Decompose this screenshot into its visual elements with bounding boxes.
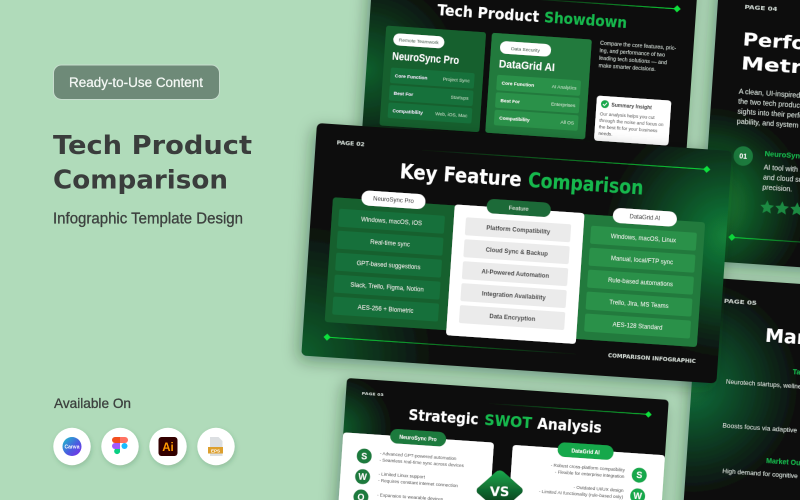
label: DataGrid AI pill xyxy=(612,208,677,227)
column: NeuroSync Pro: AES-256 + Biometric xyxy=(357,305,414,315)
panel: NeuroSync Pro SWOT: NeuroSync Pro xyxy=(399,435,437,443)
text block: description: leading tech solutions — and xyxy=(599,56,667,66)
column: Feature: AI-Powered Automation xyxy=(481,269,550,280)
panel: DataGrid AI SWOT: S xyxy=(636,470,643,480)
card: DataGrid AI: Data Security xyxy=(511,46,541,54)
panel: DataGrid AI SWOT xyxy=(506,439,665,500)
callout: summary insight: Summary Insight xyxy=(611,103,652,111)
title xyxy=(53,131,252,196)
column: Feature: Platform Compatibility xyxy=(486,226,551,236)
heading: key feature comparison xyxy=(399,159,644,200)
text block: intro xyxy=(737,88,800,133)
column: DataGrid AI: AES-128 Standard xyxy=(612,322,663,332)
text block: description: make smarter decisions. xyxy=(598,63,656,73)
panel: NeuroSync Pro SWOT: S xyxy=(361,451,368,461)
column: Feature xyxy=(446,196,585,344)
panel: DataGrid AI SWOT: - Robust cross-platform compatibility xyxy=(551,463,626,473)
panel: NeuroSync Pro SWOT xyxy=(336,425,494,500)
heading: strategic SWOT analysis xyxy=(408,406,602,437)
heading: tech product showdown xyxy=(437,1,628,32)
panel: intro badge: Ready-to-Use Content xyxy=(69,75,203,90)
icon: VS diamond: VS xyxy=(490,485,509,500)
column: DataGrid AI xyxy=(573,206,706,347)
heading: tech product showdown: Tech Product xyxy=(437,1,540,26)
heading: key feature comparison: Comparison xyxy=(527,168,644,200)
icon: Figma xyxy=(101,428,139,465)
panel: page 02 key feature comparison: PAGE 02 xyxy=(336,140,365,148)
column: NeuroSync Pro: Windows, macOS, iOS xyxy=(361,217,422,227)
section: market outlook xyxy=(722,455,800,481)
card: DataGrid AI: AI Analytics xyxy=(552,84,577,92)
icon: EPS file xyxy=(197,428,235,465)
icon: Canva: Canva xyxy=(64,444,80,450)
text block: description xyxy=(598,41,677,74)
metric: 01 NeuroSync xyxy=(730,146,800,218)
callout: summary insight: the best fit for your business xyxy=(599,124,658,133)
panel: page 05 market analysis: PAGE 05 xyxy=(724,299,757,307)
title: Comparison xyxy=(53,166,228,196)
card: NeuroSync Pro: Web, iOS, Mac xyxy=(435,111,468,119)
text block: description: ing, and performance of two xyxy=(599,48,665,59)
section: target audience xyxy=(726,365,800,394)
availability heading: Available On xyxy=(54,395,131,411)
heading: strategic SWOT analysis: Strategic xyxy=(408,406,479,429)
panel: DataGrid AI SWOT: - Limited AI functionality (rule-based only) xyxy=(539,489,624,500)
panel: page 03 SWOT analysis xyxy=(335,378,669,500)
card: DataGrid AI xyxy=(485,33,592,139)
panel: intro badge xyxy=(54,65,220,100)
column: DataGrid AI: Manual, local/FTP sync xyxy=(611,256,673,266)
panel: DataGrid AI SWOT: - Outdated UI/UX design xyxy=(573,485,624,493)
panel: DataGrid AI SWOT: - Flexible for enterprise integration xyxy=(555,469,625,479)
section: benefit: Boosts focus via adaptive xyxy=(722,422,798,435)
text block: description: Compare the core features, pric- xyxy=(600,41,677,52)
icon: Adobe Illustrator: Ai xyxy=(162,442,174,454)
label: Feature pill xyxy=(486,199,551,217)
icon: EPS file: EPS xyxy=(211,448,220,453)
card: NeuroSync Pro: Startups xyxy=(450,95,469,102)
column: Feature: Data Encryption xyxy=(489,314,536,323)
icon: VS diamond xyxy=(477,471,523,500)
column: NeuroSync Pro: GPT-based suggestions xyxy=(356,261,421,271)
icon: Canva xyxy=(53,428,91,465)
card: DataGrid AI: Core Function xyxy=(501,81,534,89)
card: DataGrid AI: All OS xyxy=(560,120,574,127)
column: Feature: Integration Availability xyxy=(482,291,546,302)
subtitle: Infographic Template Design xyxy=(53,210,243,228)
card: NeuroSync Pro: NeuroSync Pro xyxy=(392,51,460,67)
callout: summary insight: through the noise and focus on xyxy=(599,118,664,127)
card: NeuroSync Pro xyxy=(379,26,486,132)
heading: strategic SWOT analysis: SWOT xyxy=(484,411,533,432)
panel: NeuroSync Pro SWOT: - Advanced GPT-powered automation xyxy=(380,451,457,461)
column: DataGrid AI: Windows, macOS, Linux xyxy=(611,234,676,244)
card: DataGrid AI: Compatibility xyxy=(499,116,530,124)
panel: DataGrid AI SWOT: DataGrid AI xyxy=(571,448,600,456)
label: DataGrid AI pill: DataGrid AI xyxy=(629,214,661,222)
card: NeuroSync Pro: Remote Teamwork xyxy=(399,37,439,46)
panel: page 01 product showdown xyxy=(361,0,699,162)
heading: performance metrics xyxy=(741,29,800,84)
title: Tech Product xyxy=(53,131,252,161)
panel: page 02 key feature comparison xyxy=(301,123,732,383)
column: NeuroSync Pro: Real-time sync xyxy=(370,240,410,249)
metric: 01 NeuroSync: precision. xyxy=(762,184,793,193)
column: NeuroSync Pro: Slack, Trello, Figma, Notion xyxy=(350,283,424,294)
panel: NeuroSync Pro SWOT: W xyxy=(358,472,368,482)
callout: summary insight xyxy=(594,96,671,146)
panel: NeuroSync Pro SWOT: - Requires constant internet connection xyxy=(378,478,458,488)
column: DataGrid AI: Rule-based automations xyxy=(608,278,673,288)
card: NeuroSync Pro: Best For xyxy=(393,91,413,98)
panel: NeuroSync Pro SWOT: - Limited Linux support xyxy=(378,471,426,480)
column: Feature: Cloud Sync & Backup xyxy=(485,248,548,258)
column: DataGrid AI: Trello, Jira, MS Teams xyxy=(609,300,669,310)
card: NeuroSync Pro: Compatibility xyxy=(392,108,423,116)
panel: page 03 SWOT analysis: PAGE 03 xyxy=(362,391,384,397)
label: NeuroSync Pro pill: NeuroSync Pro xyxy=(373,196,415,205)
card: DataGrid AI: Enterprises xyxy=(551,101,576,109)
section: market outlook: High demand for cognitive xyxy=(722,468,798,480)
metric: 01 NeuroSync: 01 xyxy=(739,153,747,161)
column: NeuroSync Pro xyxy=(325,188,458,330)
label: Feature pill: Feature xyxy=(508,206,529,213)
footer label: COMPARISON INFOGRAPHIC xyxy=(608,353,697,365)
panel: page 05 market analysis xyxy=(681,277,800,500)
card: DataGrid AI: Best For xyxy=(500,98,520,105)
card: NeuroSync Pro: Project Sync xyxy=(443,77,470,84)
card: NeuroSync Pro: Core Function xyxy=(395,73,428,82)
callout: summary insight: Our analysis helps you cut xyxy=(600,111,656,120)
label: NeuroSync Pro pill xyxy=(361,190,426,209)
panel: page 04 performance metrics xyxy=(700,0,800,274)
heading: key feature comparison: Key Feature xyxy=(399,159,522,191)
heading: strategic SWOT analysis: Analysis xyxy=(537,415,602,437)
icon: Adobe Illustrator xyxy=(149,428,187,465)
panel: NeuroSync Pro SWOT: - Seamless real-time sync across devices xyxy=(379,457,465,468)
card: DataGrid AI: DataGrid AI xyxy=(499,58,555,74)
heading: tech product showdown: Showdown xyxy=(544,8,628,32)
panel: page 04 performance metrics: PAGE 04 xyxy=(744,5,779,13)
callout: summary insight: needs. xyxy=(598,131,613,137)
